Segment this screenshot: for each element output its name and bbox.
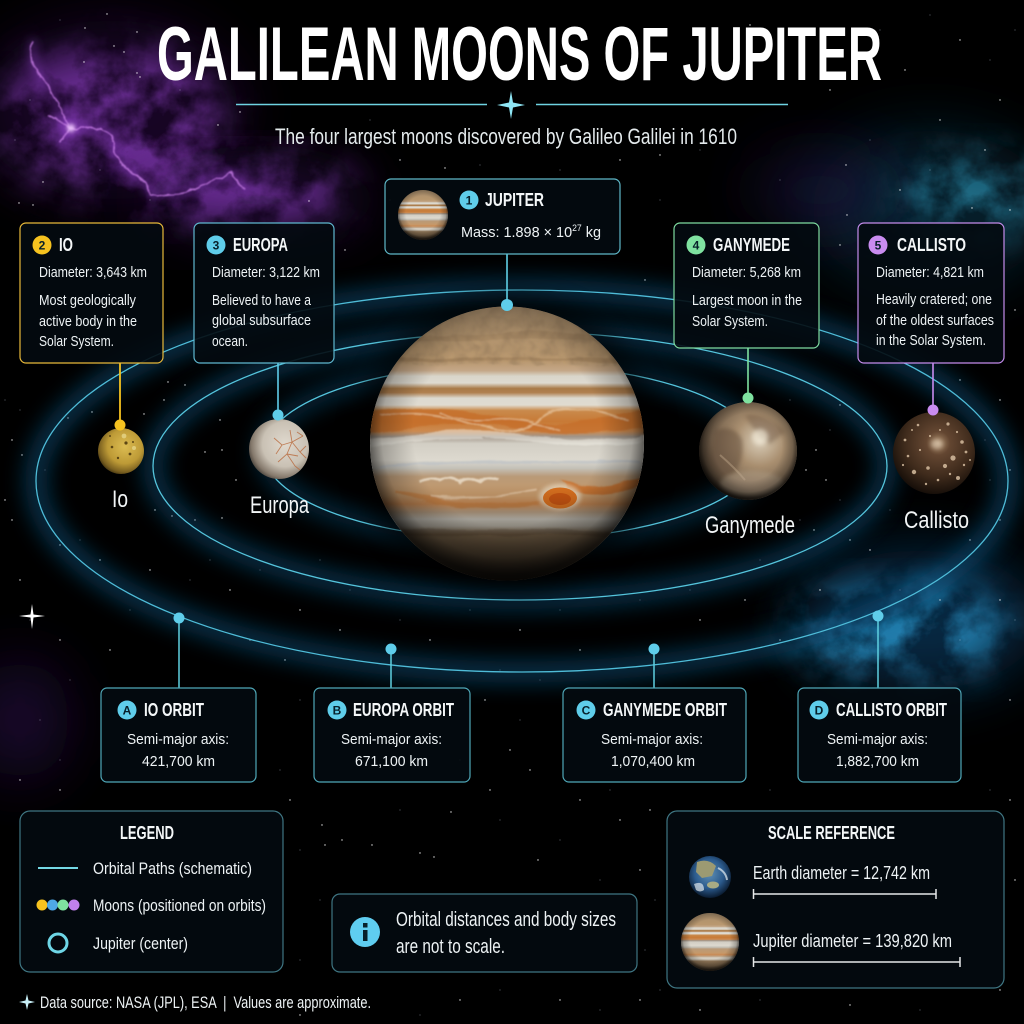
description: of the oldest surfaces xyxy=(876,312,994,329)
note text: are not to scale. xyxy=(396,936,505,958)
badge 4 xyxy=(686,236,706,254)
jupiter scale xyxy=(753,931,960,967)
badge 2: 2 xyxy=(39,238,46,252)
icon: info xyxy=(350,917,380,947)
label: Ganymede: Ganymede xyxy=(705,512,795,539)
footer star xyxy=(19,994,35,1010)
description: global subsurface xyxy=(212,312,311,329)
bright star xyxy=(19,604,45,629)
description: Solar System. xyxy=(692,313,768,330)
value: 1,882,700 km xyxy=(836,753,919,770)
panel: note xyxy=(332,894,637,972)
value: Semi-major axis: xyxy=(341,731,442,748)
panel: Io card xyxy=(20,223,163,363)
description: Solar System. xyxy=(39,333,114,350)
legend heading: LEGEND xyxy=(120,823,174,843)
badge A xyxy=(118,700,136,720)
description: Believed to have a xyxy=(212,292,312,309)
connector: Ganymede card to moon xyxy=(742,348,754,404)
label: Io: Io xyxy=(112,486,128,513)
footer: data source: Data source: NASA (JPL), ESA | Values are approximate. xyxy=(40,993,371,1012)
value: Semi-major axis: xyxy=(827,731,928,748)
orbit: Europa inner ellipse xyxy=(264,364,760,540)
planet: Jupiter xyxy=(357,294,657,594)
mass: kg xyxy=(582,224,601,241)
connector: Callisto orbit xyxy=(872,610,884,688)
value: Semi-major axis: xyxy=(601,731,703,748)
connector: Io orbit xyxy=(174,612,184,688)
value: 421,700 km xyxy=(142,753,215,770)
connector: Europa orbit xyxy=(386,644,396,688)
description xyxy=(212,292,312,350)
heading: EUROPA ORBIT xyxy=(353,700,454,720)
connector: Europa card to moon xyxy=(272,363,284,420)
icon: Jupiter scale xyxy=(681,913,739,971)
description: in the Solar System. xyxy=(876,332,986,349)
card heading: GANYMEDE xyxy=(713,235,790,255)
badge 1 xyxy=(460,190,478,210)
value xyxy=(341,731,442,770)
earth scale xyxy=(753,863,936,899)
value xyxy=(601,731,703,770)
legend: orbital paths: Orbital Paths (schematic) xyxy=(93,859,252,878)
moon: Europa xyxy=(249,419,309,479)
moon: Io xyxy=(98,428,144,474)
moon: Callisto xyxy=(893,412,975,494)
badge 3: 3 xyxy=(213,238,220,252)
description: Heavily cratered; one xyxy=(876,291,992,308)
panel: Ganymede card xyxy=(674,223,819,348)
description: active body in the xyxy=(39,313,137,330)
badge B xyxy=(328,700,346,720)
jupiter scale: Jupiter diameter = 139,820 km xyxy=(753,931,952,951)
connector: Jupiter card to planet xyxy=(501,254,513,311)
badge 5: 5 xyxy=(875,238,882,252)
legend: Jupiter xyxy=(49,934,188,953)
mass: Mass: 1.898 × 10 xyxy=(461,224,576,241)
scale heading: SCALE REFERENCE xyxy=(768,823,895,843)
badge D: D xyxy=(815,704,824,718)
value: 671,100 km xyxy=(355,753,428,770)
card heading: IO xyxy=(59,235,73,255)
earth scale: Earth diameter = 12,742 km xyxy=(753,863,930,883)
panel: Io orbit xyxy=(101,688,256,782)
value: Semi-major axis: xyxy=(127,731,229,748)
panel: scale reference xyxy=(667,811,1004,988)
panel: Jupiter card xyxy=(385,179,620,254)
connector: Ganymede orbit xyxy=(648,644,660,688)
legend: moons xyxy=(36,896,266,915)
diameter: Diameter: 3,122 km xyxy=(212,264,320,281)
connector: Io card to moon xyxy=(114,363,126,430)
diameter: Diameter: 5,268 km xyxy=(692,264,801,281)
orbit: Ganymede middle ellipse xyxy=(153,332,887,600)
diameter: Diameter: 4,821 km xyxy=(876,264,984,281)
icon: mini Jupiter xyxy=(398,190,448,240)
moon: Ganymede xyxy=(699,402,797,500)
badge C: C xyxy=(582,704,591,718)
description: ocean. xyxy=(212,333,248,350)
card heading: JUPITER xyxy=(485,190,544,210)
icon: Earth xyxy=(689,856,731,898)
heading: GANYMEDE ORBIT xyxy=(603,700,727,720)
diameter: Diameter: 3,643 km xyxy=(39,264,147,281)
panel: Ganymede orbit xyxy=(563,688,746,782)
badge B: B xyxy=(333,704,342,718)
note text xyxy=(396,909,616,958)
subtitle: The four largest moons discovered by Galileo Galilei in 1610 xyxy=(275,124,737,149)
badge 5 xyxy=(868,236,888,254)
value: 1,070,400 km xyxy=(611,753,695,770)
badge 4: 4 xyxy=(693,238,700,252)
panel: Callisto card xyxy=(858,223,1004,363)
panel: legend xyxy=(20,811,283,972)
badge C xyxy=(576,700,596,720)
title divider with star xyxy=(236,91,788,119)
badge 1: 1 xyxy=(466,194,473,208)
description: Most geologically xyxy=(39,292,136,309)
panel: Europa card xyxy=(194,223,334,363)
note text: Orbital distances and body sizes xyxy=(396,909,616,931)
panel: Europa orbit xyxy=(314,688,470,782)
label: Europa: Europa xyxy=(250,492,309,519)
legend: Jupiter: Jupiter (center) xyxy=(93,934,188,953)
description xyxy=(692,292,802,330)
connector: Callisto card to moon xyxy=(928,363,938,416)
label: Callisto: Callisto xyxy=(904,507,969,534)
panel: Callisto orbit xyxy=(798,688,961,782)
mass: 27 xyxy=(572,223,582,233)
card heading: CALLISTO xyxy=(897,235,966,255)
badge A: A xyxy=(123,704,132,718)
value xyxy=(127,731,229,770)
heading: IO ORBIT xyxy=(144,700,204,720)
badge 2 xyxy=(32,236,52,254)
orbit: Callisto outer ellipse xyxy=(36,290,1008,672)
description xyxy=(876,291,994,349)
card heading: EUROPA xyxy=(233,235,288,255)
legend: moons: Moons (positioned on orbits) xyxy=(93,896,266,915)
badge D xyxy=(810,700,828,720)
heading: CALLISTO ORBIT xyxy=(836,700,947,720)
description xyxy=(39,292,137,350)
value xyxy=(827,731,928,770)
description: Largest moon in the xyxy=(692,292,802,309)
